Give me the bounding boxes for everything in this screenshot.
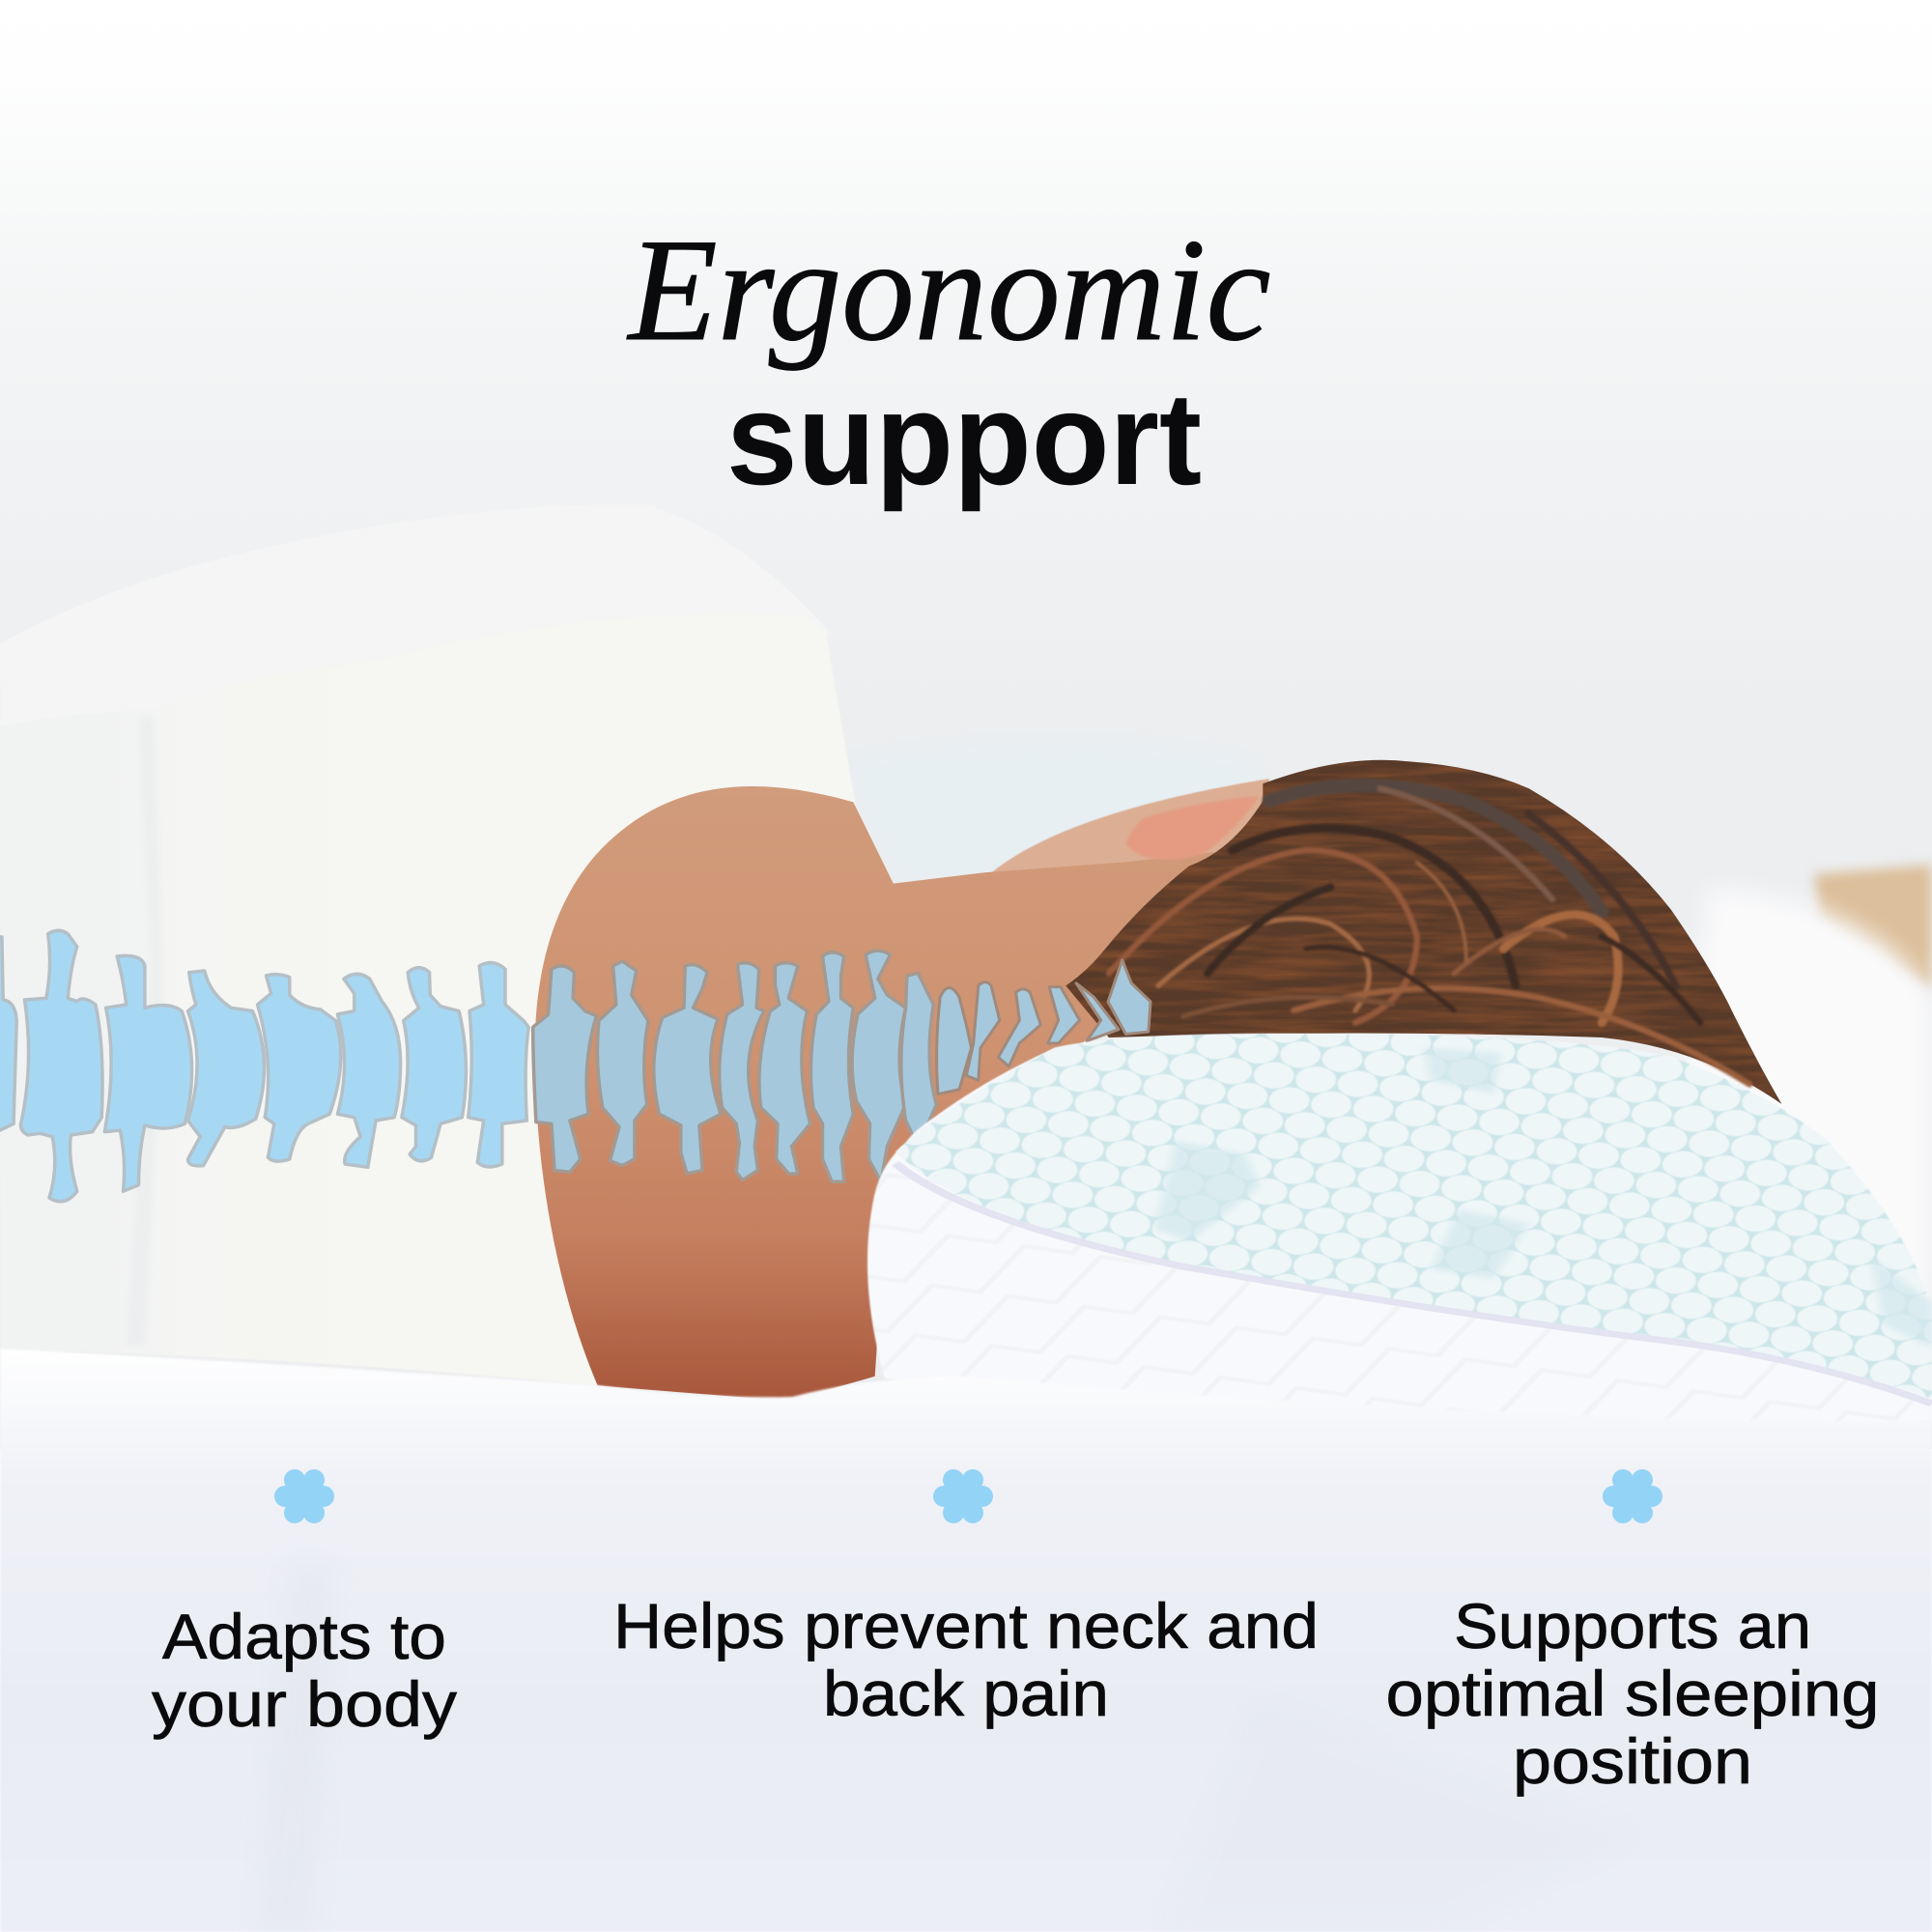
vertebrae at the neck [937, 960, 1151, 1094]
benefit: prevents pain [613, 1469, 1319, 1729]
knit panels [1154, 1048, 1932, 1349]
icon: blue flower [1603, 1469, 1662, 1523]
icon: blue flower [933, 1469, 993, 1523]
woman lying on her side [0, 504, 1269, 1401]
title bold line: support [726, 365, 1202, 512]
benefit text: position [1513, 1725, 1752, 1797]
title italic line: Ergonomic [627, 209, 1271, 371]
upper arm over the body [0, 504, 829, 729]
vertebrae over shirt [0, 930, 528, 1202]
benefit text: Helps prevent neck and [613, 1590, 1319, 1662]
rear pillow [840, 744, 1256, 884]
benefit text: optimal sleeping [1385, 1658, 1880, 1729]
sheet folds [256, 1565, 1642, 1932]
vertebrae over skin [533, 951, 936, 1181]
pillow body [867, 1034, 1932, 1427]
shirt [0, 614, 857, 1385]
back and neck skin [535, 786, 1233, 1401]
benefit text: your body [152, 1668, 457, 1740]
background bedding [1642, 889, 1932, 1430]
blurred bedroom background [840, 744, 1932, 1430]
benefit text: back pain [823, 1658, 1109, 1729]
bedside table [1814, 865, 1932, 990]
pillow top knit surface [895, 1034, 1932, 1399]
benefit: sleeping position [1385, 1469, 1880, 1797]
benefit text: Adapts to [162, 1601, 446, 1672]
bed sheet [0, 1349, 1932, 1932]
shirt fold [127, 717, 163, 1346]
title [627, 209, 1271, 512]
benefit text: Supports an [1454, 1590, 1811, 1662]
benefit: adapts [152, 1469, 457, 1740]
icon: blue flower [274, 1469, 334, 1523]
hair [1065, 760, 1781, 1104]
ear [1126, 796, 1260, 860]
spine illustration [0, 930, 936, 1202]
zipper [895, 1163, 1932, 1404]
hair strands [1109, 785, 1749, 1084]
head side skin [985, 779, 1269, 952]
pillow [867, 1034, 1932, 1427]
background wall [0, 0, 1932, 1449]
